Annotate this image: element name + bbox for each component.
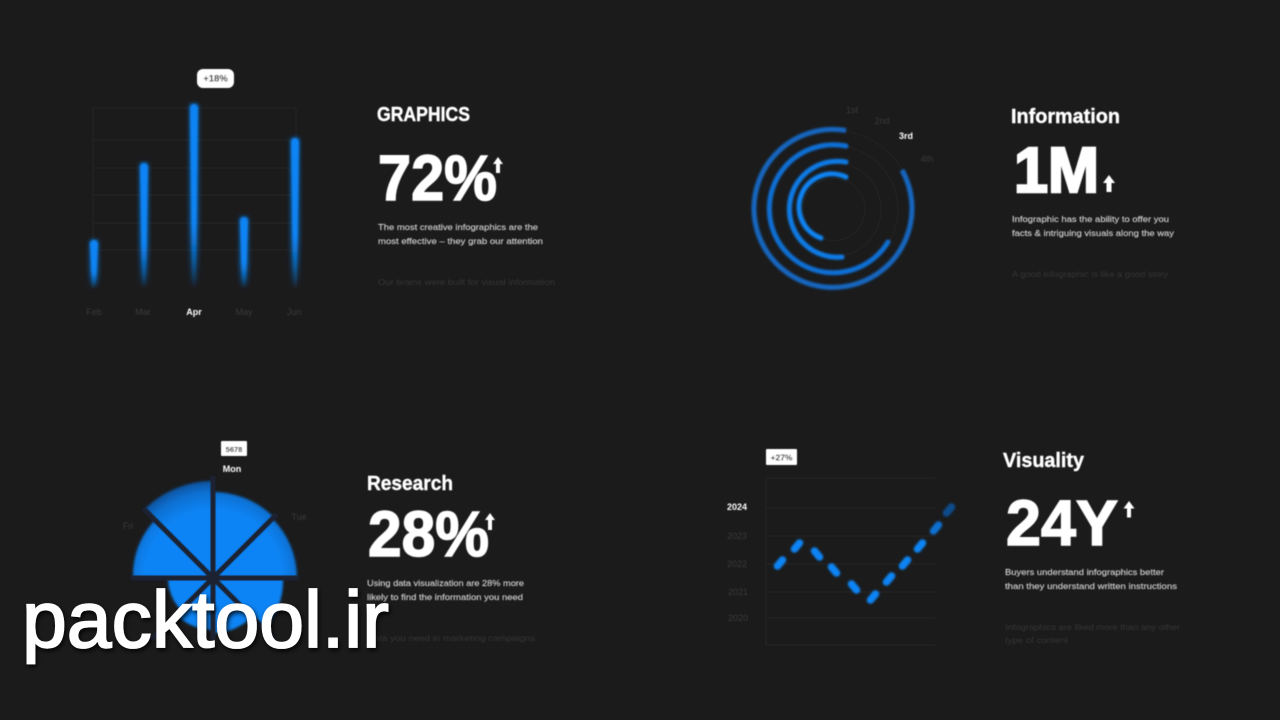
badge: +27%: +27% [771,452,793,462]
pie chart [123,441,307,640]
year labels [727,502,748,623]
radial bar chart [754,105,933,288]
stat: 1M [1014,134,1099,206]
description [378,222,543,246]
icon: up arrow [485,513,495,530]
text block: visuality [1003,449,1180,645]
heading: GRAPHICS [377,103,470,126]
badge: +18% [197,69,234,88]
faint note: Our brains were built for visual information [378,277,555,287]
heading: Information [1011,105,1120,128]
description [1012,214,1175,238]
description: than they understand written instructions [1005,581,1177,591]
faint note [1005,622,1180,645]
panel: graphics [86,69,555,317]
icon: up arrow [1124,501,1134,518]
day labels: Mon [223,464,241,474]
description: Buyers understand infographics better [1005,567,1164,577]
rank labels: 1st [846,105,858,115]
bar chart [86,69,301,317]
text block: information [1011,105,1175,279]
text block: graphics [377,103,555,287]
year labels: 2021 [728,587,748,597]
description: Using data visualization are 28% more [367,578,524,588]
panel: visuality [727,449,1180,645]
rank labels: 2nd [874,116,890,126]
stat: 72% [378,142,497,214]
line chart [727,449,952,645]
rank labels: 4th [921,154,933,164]
badge: +27% [766,449,797,465]
day labels [123,464,307,531]
wedges [133,481,297,633]
month labels: Jun [287,307,301,317]
faint note: type of content [1005,635,1069,645]
year labels: 2024 [727,502,747,512]
bars [90,104,299,288]
month labels: Feb [86,307,102,317]
year labels: 2022 [727,559,747,569]
month labels: Apr [186,307,202,317]
month labels: Mar [135,307,151,317]
panel: information [754,105,1175,288]
description [367,578,524,602]
icon: up arrow [1103,175,1115,192]
stat: 28% [368,498,489,570]
watermark: packtool.ir [22,575,389,664]
month labels: May [235,307,253,317]
text block: research [367,472,535,643]
day labels: Fri [123,521,133,531]
description: The most creative infographics are the [378,222,538,232]
rings [754,129,912,287]
year labels: 2023 [727,531,747,541]
rank labels: 3rd [899,131,913,141]
description: likely to find the information you need [367,592,523,602]
badge: +18%: +18% [203,74,228,84]
badge: value: 5678 [226,445,242,454]
heading: Research [367,472,453,495]
faint note: Data you need in marketing campaigns [367,633,535,643]
description: Infographic has the ability to offer you [1012,214,1169,224]
description [1005,567,1177,591]
spokes [131,476,299,640]
rank labels [846,105,933,164]
day labels: Tue [291,512,307,522]
description: facts & intriguing visuals along the way [1012,228,1175,238]
year labels: 2020 [728,613,748,623]
stat: 24Y [1006,487,1118,559]
icon: up arrow [493,157,503,173]
bars glow [90,104,299,288]
panel: research [123,441,535,643]
heading: Visuality [1003,449,1085,472]
month labels [86,307,301,317]
badge: value [221,441,247,456]
dashed trend line [778,507,952,600]
faint note: Infographics are liked more than any other [1005,622,1180,632]
faint note: A good infographic is like a good story [1012,269,1169,279]
description: most effective – they grab our attention [378,236,543,246]
